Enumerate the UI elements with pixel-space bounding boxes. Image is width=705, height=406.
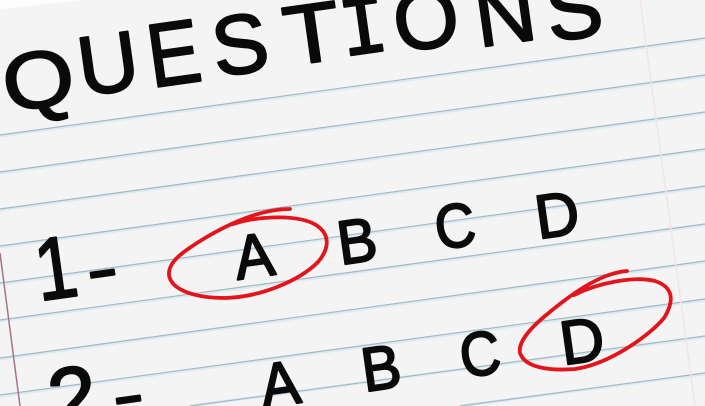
question 1: D [531, 178, 584, 253]
question 2: B [357, 330, 405, 405]
title: QUESTIONS: E [140, 0, 207, 107]
question 2: D [556, 304, 609, 379]
red circle around answer D [520, 271, 671, 370]
question 1: C [430, 190, 480, 263]
right margin line [640, 0, 695, 406]
question 1: B [333, 203, 381, 278]
question 2: C [455, 318, 505, 391]
question 2 [42, 304, 609, 406]
question 1: 1 [28, 217, 83, 320]
title: QUESTIONS: U [71, 13, 145, 114]
title: QUESTIONS [0, 0, 608, 129]
question 1: - [82, 230, 122, 308]
red circle around answer A [169, 209, 327, 298]
question 1: A [230, 218, 279, 293]
left margin line [0, 253, 20, 406]
question 1 [28, 178, 584, 320]
